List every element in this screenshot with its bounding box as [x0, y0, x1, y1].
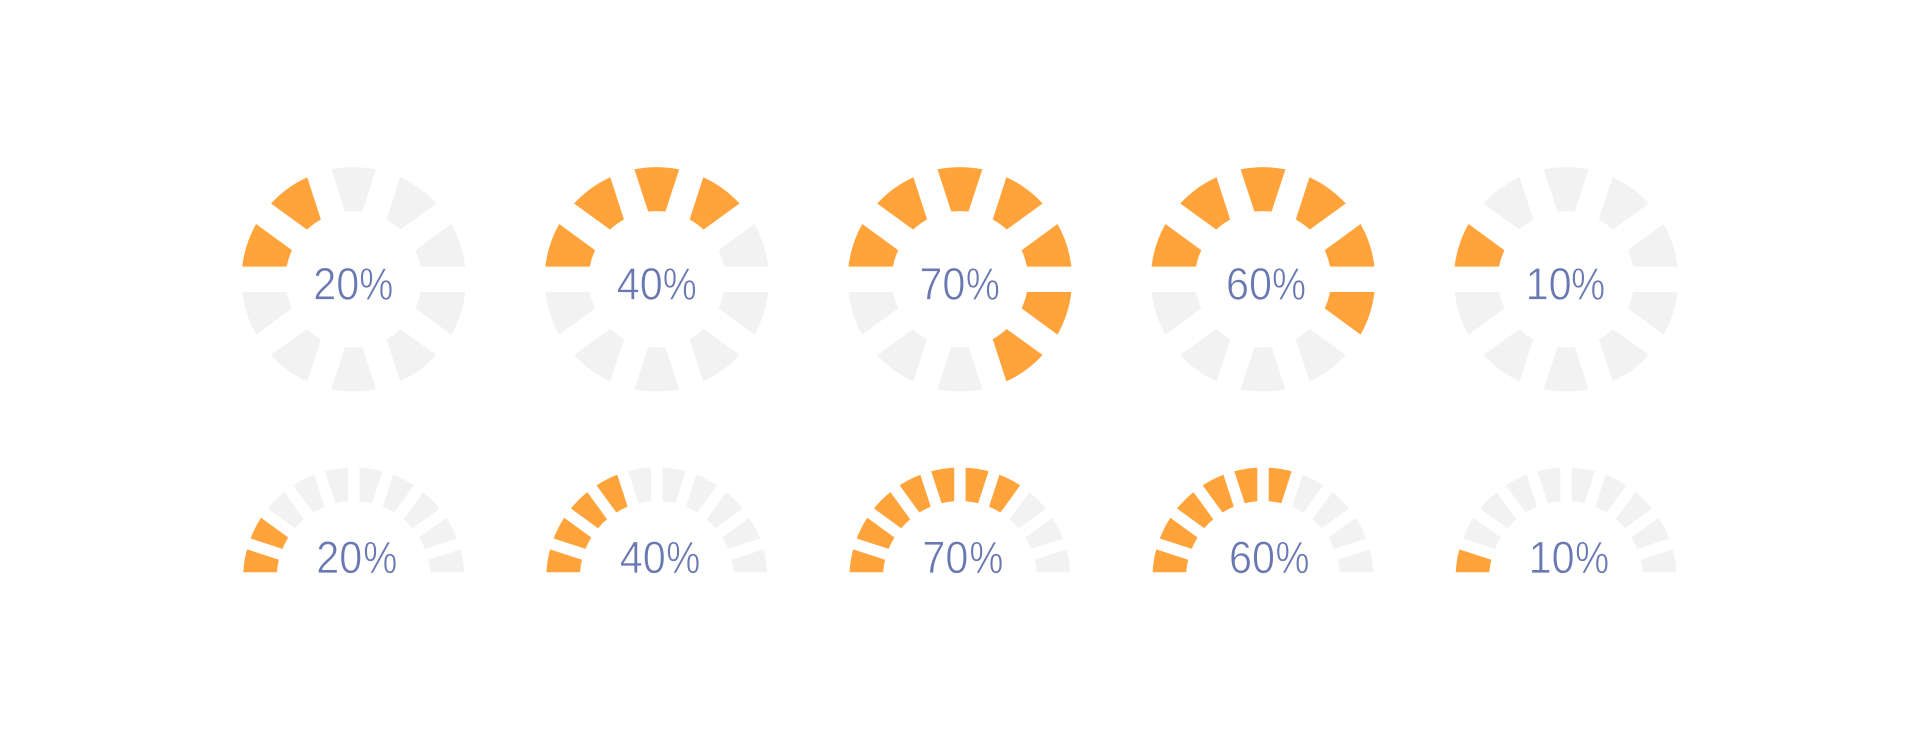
value label: %: [969, 532, 1003, 583]
arc segments: 4 of 10 filled: [546, 467, 768, 577]
arc segments: 7 of 10 filled: [849, 467, 1071, 577]
value label: %: [666, 532, 700, 583]
value label: [620, 532, 700, 583]
value label: %: [363, 532, 397, 583]
circular gauge: 40%: [543, 167, 770, 391]
value label: %: [1575, 532, 1609, 583]
value label: [922, 532, 1003, 583]
value label: [1226, 258, 1306, 310]
value label: 40: [617, 258, 663, 309]
value label: %: [1276, 532, 1310, 583]
semicircular gauge: 40%: [546, 467, 768, 583]
semicircular gauge: 60%: [1152, 467, 1374, 583]
circular gauge: 20%: [240, 167, 467, 391]
value label: [316, 532, 397, 583]
value label: 60: [1226, 258, 1272, 309]
arc segments: 2 of 10 filled: [243, 467, 465, 577]
semicircular gauge: 20%: [243, 467, 465, 583]
ring segments: 2 of 10 filled: [240, 167, 467, 391]
value label: [617, 258, 697, 310]
ring segments: 7 of 10 filled: [846, 167, 1073, 391]
value label: 20: [316, 532, 362, 583]
value label: 20: [313, 258, 359, 309]
ring segments: 1 of 10 filled: [1453, 167, 1680, 391]
value label: %: [966, 258, 1000, 309]
value label: 70: [919, 258, 965, 309]
value label: %: [1571, 258, 1605, 309]
circular gauge: 70%: [846, 167, 1073, 391]
semicircular gauge: 70%: [849, 467, 1071, 583]
value label: %: [1272, 258, 1306, 309]
value label: [1529, 532, 1609, 583]
circular gauge: 10%: [1453, 167, 1680, 391]
ring segments: 6 of 10 filled: [1149, 167, 1377, 391]
value label: 10: [1529, 532, 1575, 583]
semicircular gauge: 10%: [1455, 467, 1677, 583]
arc segments: 1 of 10 filled: [1455, 467, 1677, 577]
value label: %: [359, 258, 393, 309]
circular gauge: 60%: [1149, 167, 1377, 391]
value label: 60: [1229, 532, 1275, 583]
value label: [313, 258, 393, 310]
arc segments: 6 of 10 filled: [1152, 467, 1374, 577]
value label: 10: [1526, 258, 1572, 309]
value label: 70: [922, 532, 968, 583]
ring segments: 4 of 10 filled: [543, 167, 770, 391]
value label: %: [663, 258, 697, 309]
value label: [1526, 258, 1605, 310]
value label: [1229, 532, 1310, 583]
value label: 40: [620, 532, 666, 583]
value label: [919, 258, 1000, 310]
